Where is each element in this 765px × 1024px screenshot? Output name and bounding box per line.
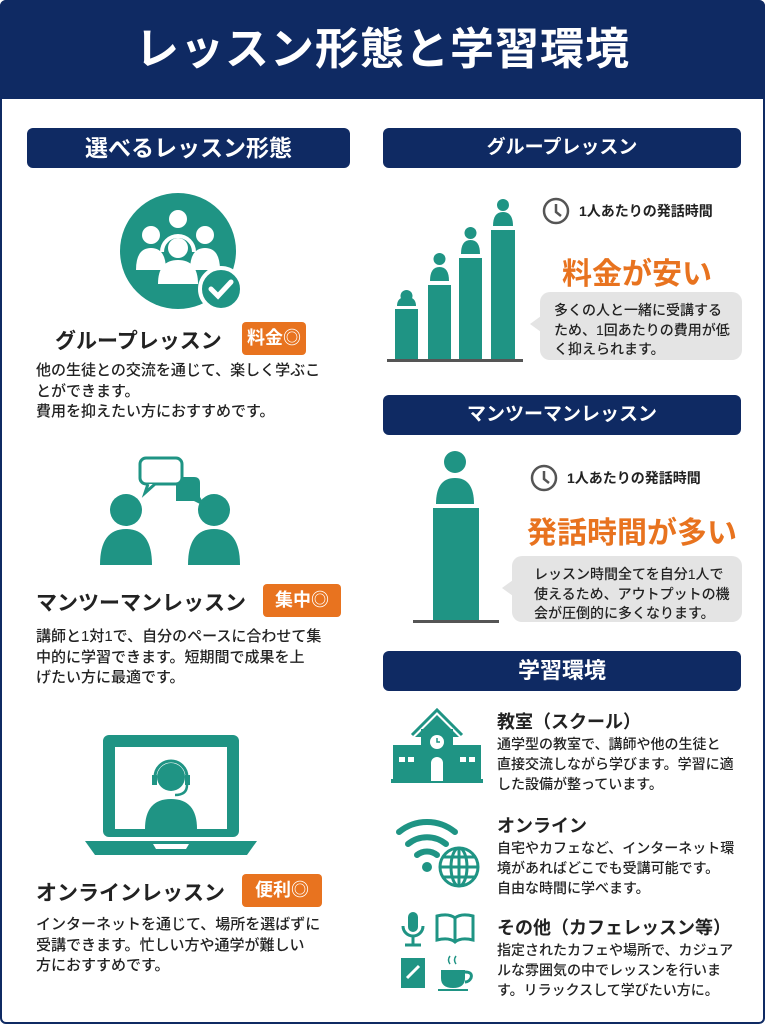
text: online lesson: 方におすすめです。 <box>36 957 170 974</box>
text: その他: 指定されたカフェや場所で、カジュア <box>497 942 733 958</box>
bubble: mantoman: レッスン時間全てを自分1人で <box>534 566 724 582</box>
text: 教室: 直接交流しながら学びます。学習に適 <box>497 756 734 772</box>
heading: 選べるレッスン形態 <box>27 128 350 168</box>
text: 教室: 通学型の教室で、講師や他の生徒と <box>497 736 720 752</box>
icon: laptop <box>85 735 257 855</box>
text: online lesson <box>36 916 320 974</box>
text: mantoman: 中的に学習できます。短期間で成果を上 <box>36 648 305 666</box>
heading: mantoman: マンツーマンレッスン <box>36 592 246 615</box>
heading: 選べるレッスン形態: 選べるレッスン形態 <box>85 135 292 161</box>
text: group: 他の生徒との交流を通じて、楽しく学ぶこ <box>36 362 320 379</box>
heading: group lesson right <box>383 128 741 168</box>
callout: 発話時間が多い: 発話時間が多い <box>527 517 737 550</box>
heading: 教室: 教室（スクール） <box>497 712 641 732</box>
heading: mantoman right: マンツーマンレッスン <box>467 404 657 425</box>
label: 1人あたりの発話時間 (mantoman): 1人あたりの発話時間 <box>567 470 701 486</box>
badge: 便利◎ <box>242 874 322 907</box>
icon: misc (mic, book, notebook, cup) <box>401 912 474 991</box>
bubble: group <box>540 292 742 360</box>
icon: group <box>120 193 240 309</box>
heading: オンライン: オンライン <box>497 816 587 836</box>
text: online lesson: 受講できます。忙しい方や通学が難しい <box>36 936 305 954</box>
text: その他: ルな雰囲気の中でレッスンを行いま <box>497 962 721 978</box>
icon: school <box>391 708 483 783</box>
text: その他 <box>497 942 733 998</box>
bubble: group: く抑えられます。 <box>554 341 665 357</box>
callout: 料金が安い: 料金が安い <box>562 258 712 291</box>
title header <box>0 0 765 99</box>
text: mantoman: 講師と1対1で、自分のペースに合わせて集 <box>36 628 321 645</box>
badge: 集中◎: 集中◎ <box>275 590 329 610</box>
text: 教室: した設備が整っています。 <box>497 776 663 792</box>
text: 教室 <box>497 736 734 792</box>
badge: 料金◎: 料金◎ <box>247 328 301 348</box>
text: オンライン: 境があればどこでも受講可能です。 <box>497 860 719 876</box>
heading: group lesson: グループレッスン <box>55 330 222 353</box>
text: その他: す。リラックスして学びたい方に。 <box>497 982 719 998</box>
bubble: group: 多くの人と一緒に受講する <box>554 302 722 318</box>
heading: mantoman right <box>383 395 741 435</box>
icon: one-to-one <box>100 456 240 565</box>
text: オンライン: 自由な時間に学べます。 <box>497 880 650 896</box>
text: group <box>36 362 320 420</box>
text: online lesson: インターネットを通じて、場所を選ばずに <box>36 916 320 933</box>
label: 1人あたりの発話時間 (group) <box>542 198 713 224</box>
badge: 集中◎ <box>263 584 341 617</box>
text: オンライン: 自宅やカフェなど、インターネット環 <box>497 840 734 856</box>
text: group: とができます。 <box>36 382 140 400</box>
chart: group bars <box>387 199 523 362</box>
badge: 便利◎: 便利◎ <box>255 880 309 900</box>
heading: 学習環境: 学習環境 <box>518 658 606 683</box>
icon: wifi globe <box>396 819 480 888</box>
heading: その他: その他（カフェレッスン等） <box>497 918 731 938</box>
text: group: 費用を抑えたい方におすすめです。 <box>36 403 275 420</box>
label: 1人あたりの発話時間 (group): 1人あたりの発話時間 <box>579 203 713 219</box>
badge: 料金◎ <box>242 322 306 355</box>
label: 1人あたりの発話時間 (mantoman) <box>530 464 701 492</box>
text: オンライン <box>497 840 734 896</box>
text: mantoman: げたい方に最適です。 <box>36 669 185 686</box>
title header: レッスン形態と学習環境 <box>135 25 630 74</box>
bubble: mantoman: 使えるため、アウトプットの機 <box>534 586 730 602</box>
text: mantoman <box>36 628 321 686</box>
chart: single bar <box>413 451 499 623</box>
bubble: mantoman <box>512 556 742 622</box>
bubble: group: ため、1回あたりの費用が低 <box>554 322 730 338</box>
heading: 学習環境 <box>383 651 741 691</box>
heading: group lesson right: グループレッスン <box>487 137 637 158</box>
bubble: mantoman: 会が圧倒的に多くなります。 <box>534 605 715 621</box>
heading: online lesson: オンラインレッスン <box>36 882 225 905</box>
